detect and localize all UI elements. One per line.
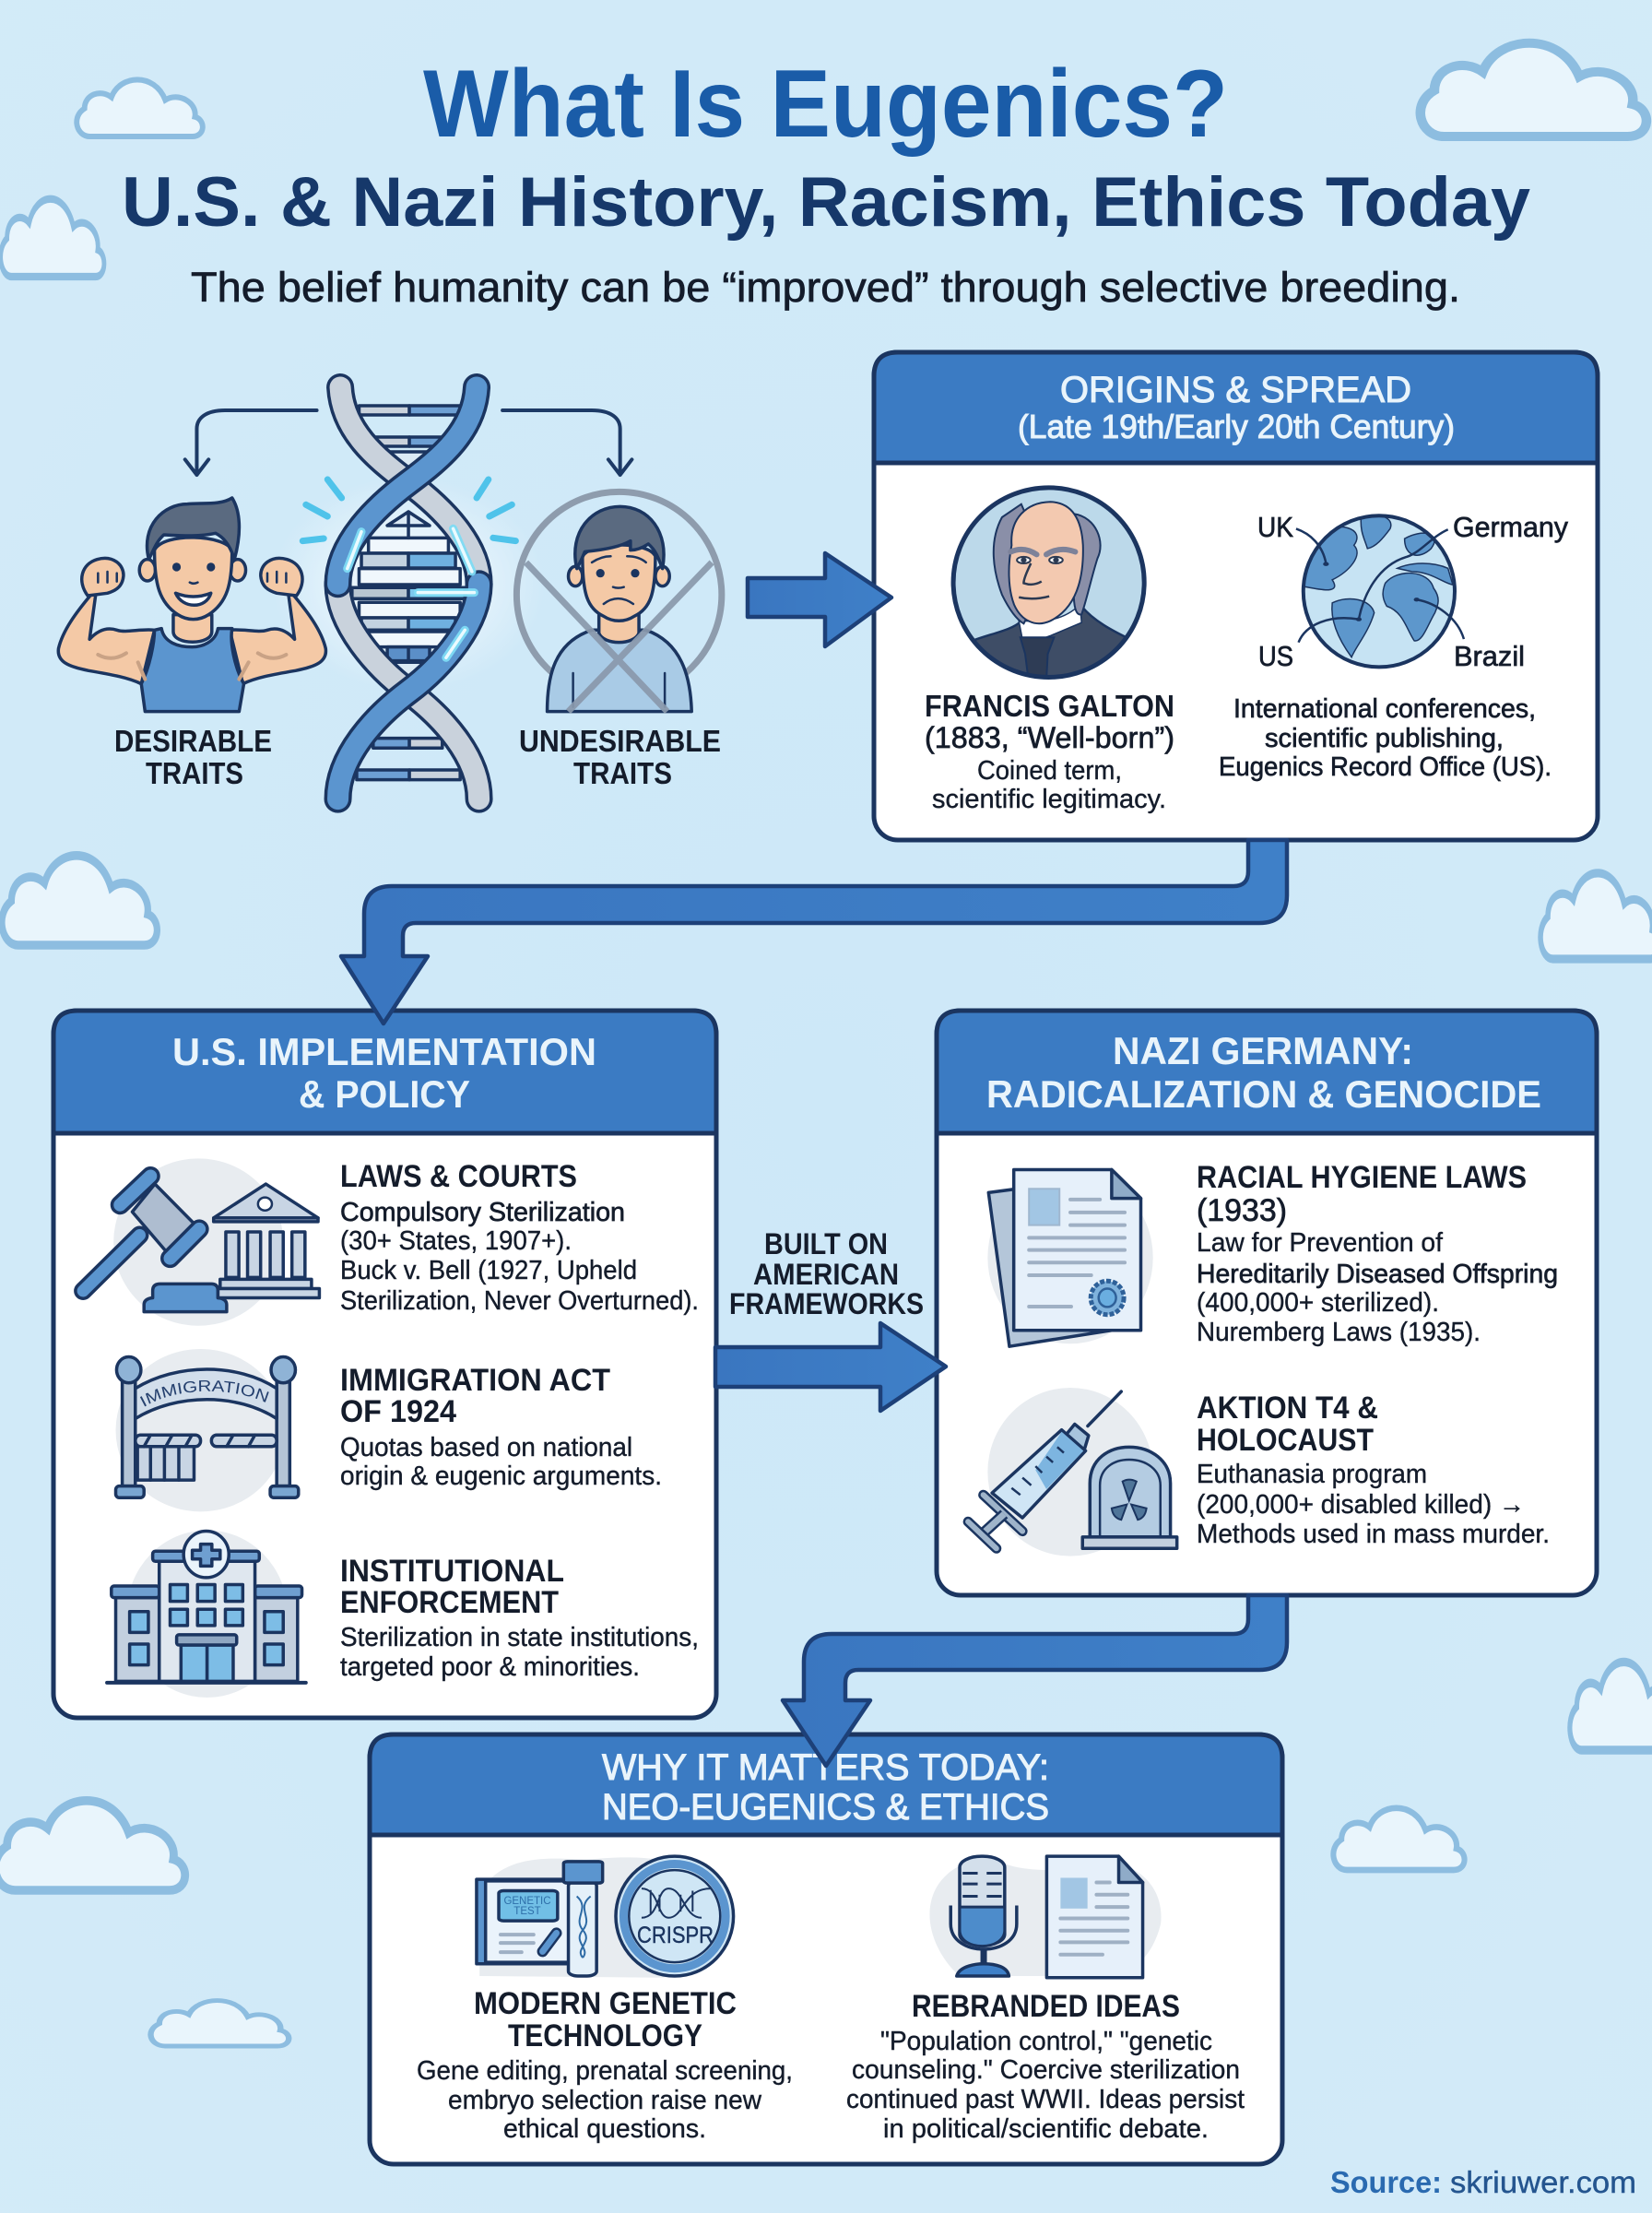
- text: modern genetic technology: MODERN GENETIC: [474, 1986, 737, 2021]
- text: racial hygiene laws: (400,000+ sterilized).: [1197, 1288, 1439, 1318]
- tagline: The belief humanity can be “improved” through selective breeding.: [191, 264, 1460, 311]
- panel heading: & POLICY: [299, 1072, 470, 1116]
- text: Francis Galton: Coined term,: [977, 756, 1122, 786]
- text: modern genetic technology: Gene editing, prenatal screening,: [417, 2056, 793, 2086]
- text: international spread: [1219, 694, 1552, 782]
- label: undesirable traits: [519, 724, 721, 790]
- text: rebranded ideas: REBRANDED IDEAS: [912, 1989, 1180, 2024]
- globe labels: UK: [1257, 511, 1293, 543]
- label: undesirable traits: UNDESIRABLE: [519, 724, 721, 758]
- text: rebranded ideas: [846, 1989, 1245, 2144]
- text: laws & courts: Compulsory Sterilization: [340, 1198, 625, 1227]
- text: laws & courts: Sterilization, Never Overturned).: [340, 1286, 699, 1316]
- icon: hospital: [107, 1531, 306, 1698]
- text: Aktion T4 & Holocaust: AKTION T4 &: [1197, 1391, 1378, 1426]
- text: racial hygiene laws: Hereditarily Diseased Offspring: [1197, 1260, 1558, 1289]
- text: Francis Galton: (1883, “Well-born”): [925, 721, 1174, 754]
- label: built on American frameworks: AMERICAN: [753, 1258, 899, 1291]
- label: built on American frameworks: BUILT ON: [764, 1227, 888, 1260]
- text: Aktion T4 & Holocaust: [1197, 1391, 1550, 1549]
- text: racial hygiene laws: RACIAL HYGIENE LAWS: [1197, 1160, 1527, 1195]
- text: rebranded ideas: in political/scientific debate.: [883, 2114, 1209, 2144]
- icon: flexing man: [58, 498, 325, 712]
- text: laws & courts: [340, 1159, 699, 1316]
- arrow: DNA to desirable traits: [185, 410, 317, 475]
- text: laws & courts: (30+ States, 1907+).: [340, 1226, 572, 1256]
- text: racial hygiene laws: Law for Prevention of: [1197, 1228, 1444, 1258]
- text: Francis Galton: scientific legitimacy.: [932, 785, 1166, 814]
- source credit: [1330, 2165, 1636, 2199]
- text: rebranded ideas: "Population control," "genetic: [880, 2027, 1212, 2056]
- label: desirable traits: DESIRABLE: [114, 724, 272, 758]
- text: immigration act: IMMIGRATION ACT: [340, 1363, 610, 1398]
- text: Aktion T4 & Holocaust: (200,000+ disabled killed) →: [1197, 1490, 1525, 1520]
- text: laws & courts: Buck v. Bell (1927, Upheld: [340, 1256, 637, 1285]
- icon: Francis Galton portrait: [953, 488, 1144, 683]
- text: rebranded ideas: continued past WWII. Ideas persist: [846, 2085, 1245, 2114]
- subtitle: U.S. & Nazi History, Racism, Ethics Today: [122, 163, 1530, 242]
- text: institutional enforcement: Sterilization in state institutions,: [340, 1623, 699, 1652]
- icon: genetic test kit and CRISPR: CRISPR: [637, 1923, 714, 1948]
- label: desirable traits: [114, 724, 272, 790]
- text: institutional enforcement: INSTITUTIONAL: [340, 1554, 564, 1589]
- text: immigration act: [340, 1363, 662, 1491]
- text: Aktion T4 & Holocaust: Methods used in mass murder.: [1197, 1520, 1550, 1549]
- panel heading: WHY IT MATTERS TODAY:: [602, 1747, 1049, 1788]
- panel heading: [1018, 370, 1455, 445]
- arrow: DNA to undesirable traits: [502, 410, 631, 475]
- arrow: Nazi Germany to today: [783, 1595, 1287, 1766]
- panel: why it matters today: [370, 1734, 1282, 2164]
- icon: immigration gate: [114, 1349, 301, 1512]
- globe labels: US: [1258, 640, 1293, 672]
- text: modern genetic technology: TECHNOLOGY: [508, 2018, 702, 2053]
- header band: [53, 1011, 716, 1133]
- icon: immigration gate: IMMIGRATION: [140, 1380, 269, 1407]
- text: racial hygiene laws: (1933): [1197, 1193, 1287, 1228]
- text: modern genetic technology: [417, 1986, 793, 2144]
- icon: genetic test kit and CRISPR: TEST: [513, 1906, 541, 1917]
- icon: microphone and document: [929, 1856, 1162, 1978]
- panel heading: RADICALIZATION & GENOCIDE: [986, 1072, 1541, 1116]
- text: institutional enforcement: ENFORCEMENT: [340, 1585, 559, 1620]
- text: institutional enforcement: targeted poor & minorities.: [340, 1652, 640, 1682]
- header band: [370, 1734, 1282, 1835]
- panel: U.S. implementation & policy: [52, 1009, 719, 1721]
- panel: origins & spread: [874, 352, 1598, 840]
- text: Francis Galton: [925, 689, 1174, 814]
- icon: genetic test kit and CRISPR: [477, 1856, 735, 1978]
- text: Aktion T4 & Holocaust: HOLOCAUST: [1197, 1423, 1374, 1458]
- source credit: skriuwer.com: [1450, 2165, 1636, 2199]
- icon: genetic test kit and CRISPR: GENETIC: [503, 1896, 551, 1907]
- label: built on American frameworks: [729, 1227, 924, 1320]
- text: racial hygiene laws: Nuremberg Laws (1935).: [1197, 1318, 1481, 1347]
- text: institutional enforcement: [340, 1554, 699, 1682]
- text: immigration act: Quotas based on national: [340, 1433, 632, 1462]
- panel heading: (Late 19th/Early 20th Century): [1018, 408, 1455, 445]
- panel heading: [602, 1747, 1049, 1828]
- text: laws & courts: LAWS & COURTS: [340, 1159, 577, 1194]
- text: Aktion T4 & Holocaust: Euthanasia program: [1197, 1460, 1427, 1489]
- panel heading: [172, 1030, 596, 1116]
- label: undesirable traits: TRAITS: [573, 756, 672, 790]
- globe labels: Brazil: [1454, 640, 1525, 672]
- icon: legal documents: [987, 1169, 1153, 1346]
- globe labels: [1257, 511, 1568, 672]
- icon: globe with connections: [1296, 515, 1464, 667]
- panel heading: ORIGINS & SPREAD: [1060, 370, 1411, 410]
- label: built on American frameworks: FRAMEWORKS: [729, 1287, 924, 1320]
- title: What Is Eugenics?: [423, 51, 1228, 158]
- icon: gavel and courthouse: [83, 1158, 319, 1326]
- text: racial hygiene laws: [1197, 1160, 1558, 1347]
- panel: Nazi Germany: [937, 1011, 1597, 1595]
- text: international spread: Eugenics Record Office (US).: [1219, 752, 1552, 782]
- panel heading: NAZI GERMANY:: [1113, 1029, 1413, 1072]
- label: desirable traits: TRAITS: [146, 756, 243, 790]
- text: immigration act: OF 1924: [340, 1394, 456, 1429]
- text: immigration act: origin & eugenic arguments.: [340, 1462, 662, 1491]
- panel heading: [986, 1029, 1541, 1116]
- icon: syringe and gravestone: [968, 1388, 1177, 1556]
- text: Francis Galton: FRANCIS GALTON: [925, 689, 1174, 723]
- text: modern genetic technology: embryo selection raise new: [448, 2086, 762, 2115]
- text: rebranded ideas: counseling." Coercive sterilization: [852, 2055, 1240, 2085]
- arrow: DNA to origins: [748, 553, 891, 646]
- text: modern genetic technology: ethical questions.: [503, 2114, 706, 2144]
- arrow: U.S. to Nazi Germany: [715, 1323, 946, 1411]
- header band: [937, 1011, 1597, 1133]
- panel heading: NEO-EUGENICS & ETHICS: [602, 1787, 1049, 1828]
- globe labels: Germany: [1453, 511, 1568, 543]
- arrow: origins to U.S.: [341, 840, 1287, 1024]
- illustration: DNA selecting traits: [58, 387, 722, 799]
- source credit: Source:: [1330, 2165, 1442, 2199]
- icon: sad crossed-out person: [516, 491, 722, 712]
- icon: DNA helix: [272, 387, 545, 799]
- header band: [874, 352, 1598, 463]
- text: international spread: International conferences,: [1233, 694, 1536, 724]
- panel heading: U.S. IMPLEMENTATION: [172, 1030, 596, 1073]
- text: international spread: scientific publishing,: [1265, 724, 1504, 753]
